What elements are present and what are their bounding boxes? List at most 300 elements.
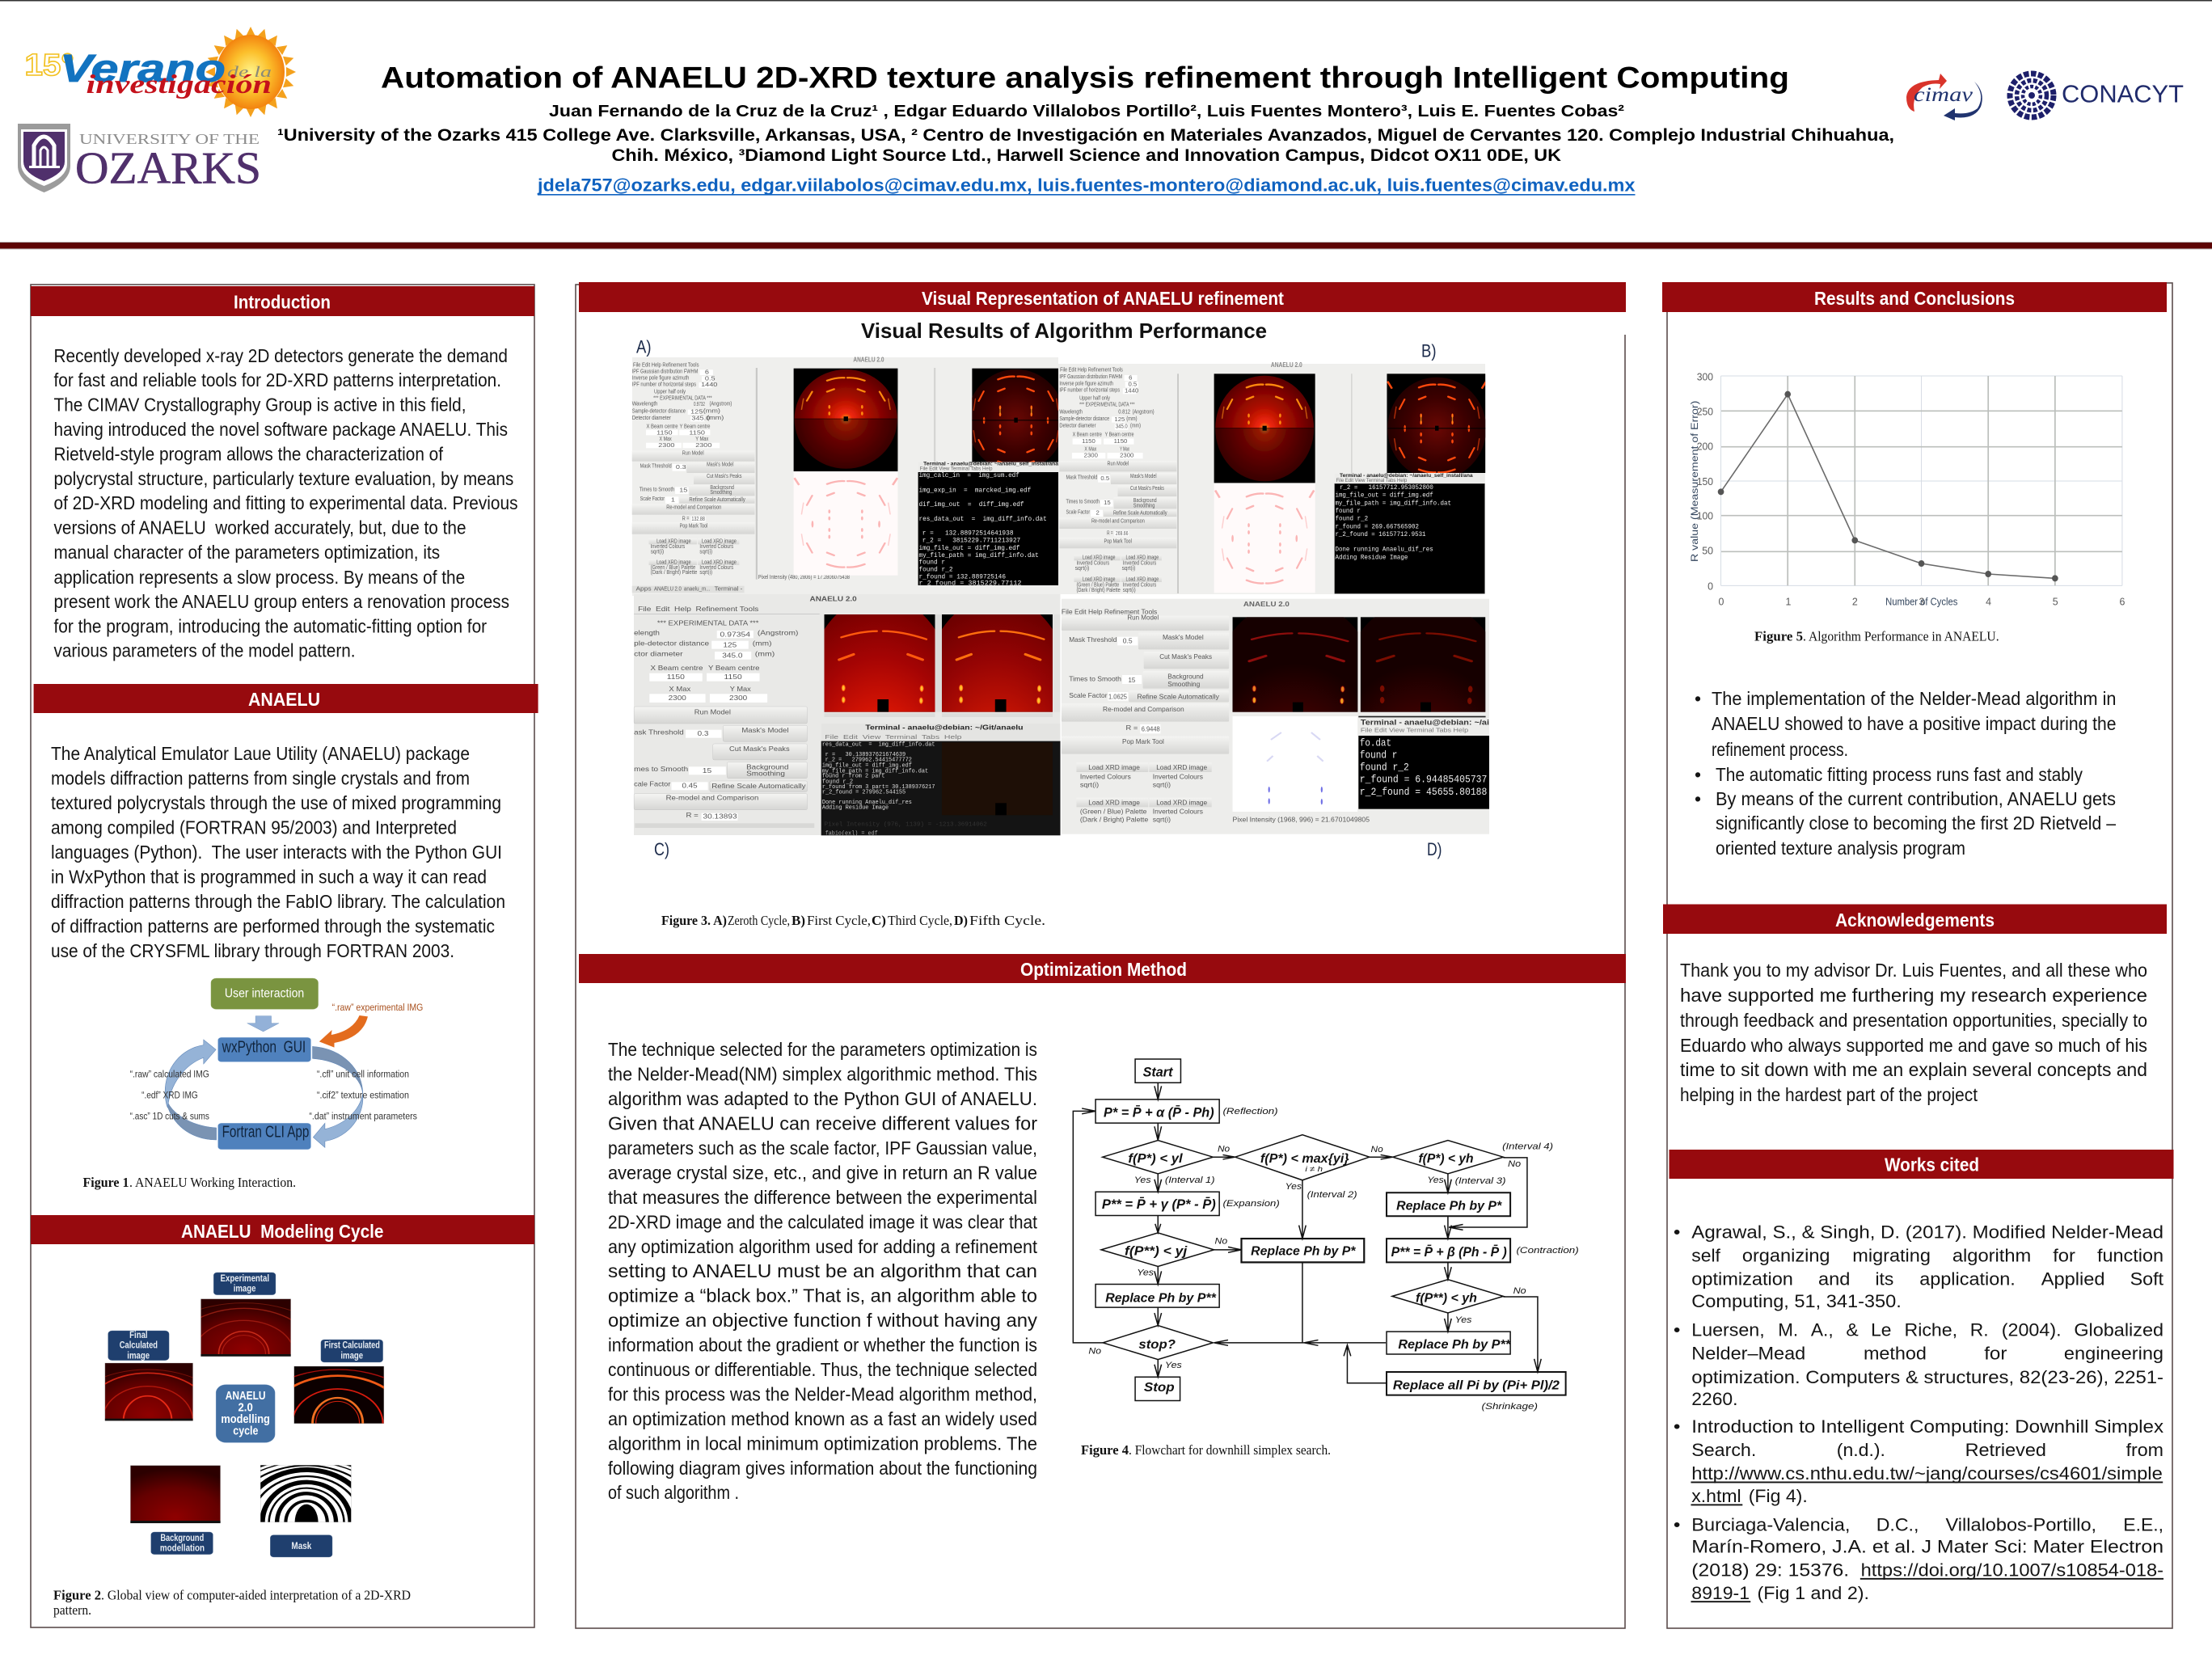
header logo: Verano de la investigación: 15°: [24, 49, 74, 82]
screenshot C: third cycle: *** EXPERIMENTAL DATA ***: [657, 619, 759, 627]
screenshot B: first cycle: sqrt(i): [1123, 586, 1136, 593]
text block: optimization method: following diagram gives information about the functioning: [608, 1458, 1037, 1479]
screenshot A: zeroth cycle: 0.5: [705, 375, 716, 382]
text block: optimization method: 2D-XRD image and the calculated image it was clear that: [608, 1211, 1038, 1232]
label: first calculated image: [321, 1340, 383, 1362]
screenshot A: zeroth cycle: Y Max: [695, 436, 708, 442]
text block: introduction: Rietveld-style program allows the characterization of: [53, 443, 443, 464]
heading: ANAELU: ANAELU: [248, 689, 320, 710]
text block: works cited: R.: [1970, 1320, 1989, 1340]
heading: ANAELU Modeling Cycle: ANAELU Modeling Cycle: [181, 1221, 383, 1242]
screenshot B: first cycle: IPF Gaussian distribution FWHM: [1059, 373, 1122, 380]
screenshot A: zeroth cycle: 0.9732: [694, 401, 705, 407]
figure 4: downhill simplex flowchart: No: [1508, 1159, 1521, 1169]
screenshot D: fifth cycle: Inverted Colours: [1080, 773, 1131, 780]
terminal D: Terminal - anaelu@debian: ~/ai: [1361, 719, 1489, 728]
screenshot A: zeroth cycle: 6: [705, 369, 710, 375]
header logo: Verano de la investigación: [24, 27, 296, 117]
text block: acknowledgements: [1680, 960, 2147, 1105]
text block: works cited: Agrawal, S., & Singh, D. (2017). Modified Nelder-Mead: [1691, 1222, 2163, 1243]
axis tick labels: 2: [1852, 595, 1858, 607]
screenshot C: third cycle: cale Factor: [634, 780, 670, 788]
text block: ANAELU description: The Analytical Emulator Laue Utility (ANAELU) package: [51, 743, 470, 764]
screenshot D: fifth cycle: [1062, 599, 1509, 834]
axis tick labels: 0: [1718, 595, 1724, 607]
screenshot A: zeroth cycle: sqrt(i): [699, 548, 712, 555]
text block: ANAELU description: diffraction patterns through the FabIO library. The calculation: [51, 891, 505, 912]
text block: works cited: function: [2097, 1245, 2163, 1265]
text block: works cited: Globalized: [2074, 1320, 2163, 1340]
header logo: Verano de la investigación: Verano: [60, 48, 226, 91]
label: D: D): [1427, 839, 1442, 859]
text block: works cited: 8919-1: [1691, 1583, 1750, 1603]
figure 4: downhill simplex flowchart: No: [1088, 1346, 1101, 1356]
terminal A: Terminal - anaelu@debian: ~/anaelu_self_install/ana: [923, 461, 1059, 466]
text block: introduction: application represents a slow process. By means of the: [53, 567, 465, 588]
terminal A: dif_img_out = diff_img.edf: [918, 500, 1024, 509]
screenshot A: zeroth cycle: ANAELU 2.0: [853, 357, 884, 363]
axis tick labels: 0: [1708, 580, 1713, 592]
screenshot D: fifth cycle: (Green / Blue) Palette: [1080, 808, 1146, 816]
text block: introduction: versions of ANAELU worked accurately, but, due to the: [53, 517, 466, 538]
axis tick labels: 200: [1697, 441, 1713, 452]
screenshot A: zeroth cycle: 0.3: [676, 464, 686, 471]
screenshot A: zeroth cycle: sqrt(i): [699, 569, 712, 576]
screenshot A: zeroth cycle: 2300: [658, 442, 675, 449]
terminal D: found r_2: [1360, 762, 1409, 774]
calculated image B: [1387, 374, 1486, 479]
text block: ANAELU description: [51, 743, 505, 961]
box: ANAELU 2.0 modelling cycle: cycle: [233, 1424, 258, 1437]
text block: optimization method: parameters such as the scale factor, IPF Gaussian value,: [608, 1138, 1037, 1159]
screenshot B: first cycle: 2300: [1120, 452, 1133, 459]
caption: figure 3: Figure 3. A): [661, 913, 727, 928]
terminal A: img_exp_in = marcked_img.edf: [918, 486, 1031, 495]
screenshot B: first cycle: 1150: [1082, 437, 1095, 445]
header logo: University of the Ozarks: OZARKS: [75, 144, 261, 194]
text block: optimization method: that measures the difference between the experimental: [608, 1187, 1037, 1208]
screenshot C: third cycle: 0.97354: [720, 631, 750, 638]
terminal C: found r from 2 part: [822, 773, 885, 779]
line chart: R value versus number of cycles: [1689, 371, 2125, 607]
text block: works cited: Burciaga-Valencia,: [1691, 1514, 1850, 1534]
figure 4: downhill simplex flowchart: Replace all Pi by (Pi+ Pl)/2: [1393, 1378, 1560, 1392]
terminal A: res_data_out = img_diff_info.dat: [918, 515, 1047, 523]
label: C: C): [654, 839, 669, 859]
header logo: University of the Ozarks: UNIVERSITY OF THE: [79, 131, 260, 147]
label: mask: [270, 1535, 332, 1557]
text block: works cited: Applied: [2041, 1268, 2104, 1289]
screenshot B: first cycle: Mask Threshold: [1066, 474, 1097, 481]
figure 4: downhill simplex flowchart: Yes: [1165, 1361, 1182, 1370]
terminal A: found r: [918, 559, 945, 567]
heading: Acknowledgements: Acknowledgements: [1835, 910, 1995, 931]
screenshot C: third cycle: X Max: [669, 686, 691, 693]
caption: figure 3: Third Cycle,: [888, 913, 952, 928]
screenshot C: third cycle: 0.3: [698, 730, 709, 737]
heading: Introduction: [31, 286, 534, 316]
text block: conclusions: ANAELU showed to have a positive impact during the: [1712, 713, 2117, 734]
logo: cimav: cimav: [1914, 84, 1973, 106]
text block: ANAELU description: in WxPython that is programmed in such a way it can read: [51, 867, 487, 888]
text block: conclusions: oriented texture analysis program: [1716, 838, 1965, 859]
text block: introduction: manual character of the parameters optimization, its: [53, 542, 440, 563]
text block: works cited: Le: [1871, 1320, 1891, 1340]
labels: file types: [130, 1069, 417, 1121]
screenshot D: fifth cycle: Load XRD image: [1088, 799, 1140, 806]
label: final calculated image: Final: [129, 1329, 148, 1340]
screenshot C: third cycle: 1150: [667, 673, 685, 681]
text block: works cited: migrating: [1852, 1245, 1931, 1265]
terminal A: r_2_found = 3815229.77112: [918, 579, 1022, 588]
screenshot D: fifth cycle: Mask's Model: [1163, 633, 1204, 641]
screenshot C: third cycle: 0.45: [682, 782, 698, 790]
screenshot C: third cycle: 2300: [729, 694, 747, 702]
screenshot A: zeroth cycle: Background: [710, 484, 734, 491]
screenshot C: third cycle: X Beam centre: [650, 665, 703, 672]
screenshot B: first cycle: Y Max: [1120, 445, 1129, 452]
figure 4: downhill simplex flowchart: No: [1218, 1144, 1230, 1154]
screenshot A: zeroth cycle: Y Beam centre: [680, 423, 711, 429]
label: final calculated image: image: [127, 1350, 150, 1361]
screenshot B: first cycle: Load XRD image: [1083, 576, 1116, 583]
labels: file types: “.edf” XRD IMG: [141, 1090, 198, 1100]
text block: optimization method: The technique selected for the parameters optimization is: [608, 1039, 1037, 1060]
figure 4: downhill simplex flowchart: (Reflection): [1222, 1106, 1278, 1116]
axis tick labels: 100: [1697, 510, 1713, 521]
figure title: Visual Results of Algorithm Performance: [861, 319, 1267, 343]
image: experimental: [201, 1298, 291, 1357]
text block: introduction: various parameters of the model pattern.: [53, 640, 356, 661]
text block: optimization method: setting to ANAELU must be an algorithm that can: [608, 1260, 1037, 1281]
arrow: raw experimental input: [319, 1015, 368, 1048]
screenshot A: zeroth cycle: Scale Factor: [640, 496, 665, 502]
text block: acknowledgements: Thank you to my advisor Dr. Luis Fuentes, and all these who: [1680, 960, 2147, 981]
diffraction image D right: [1360, 617, 1486, 712]
difference image B: [1214, 483, 1315, 593]
terminal B: my_file_path = img_diff_info.dat: [1335, 499, 1451, 507]
terminal C: my_file_path = img_diff_info.dat: [822, 768, 928, 775]
screenshot D: fifth cycle: Re-model and Comparison: [1103, 705, 1184, 713]
authors: Juan Fernando de la Cruz de la Cruz¹ , Edgar Eduardo Villalobos Portillo², Luis Fuentes Montero³, Luis E. Fuentes Cobas²: [549, 103, 1624, 120]
screenshot B: first cycle: Refine Scale Automatically: [1113, 509, 1167, 517]
screenshot A: zeroth cycle: Mask's Model: [707, 462, 734, 467]
screenshot A: zeroth cycle: Load XRD image: [656, 538, 691, 544]
text block: works cited: D.C.,: [1876, 1514, 1919, 1534]
text block: conclusions: •: [1695, 788, 1701, 809]
diffraction image B top: [1214, 374, 1315, 483]
screenshot C: third cycle: Cut Mask's Peaks: [729, 745, 790, 753]
terminal A: r = 132.88972514641938: [922, 530, 1014, 538]
figure 4: downhill simplex flowchart: No: [1215, 1236, 1227, 1246]
screenshot C: third cycle: Background: [746, 763, 789, 771]
heading: Introduction: Introduction: [234, 292, 331, 313]
figure 1: ANAELU working interaction diagram: [130, 978, 423, 1150]
terminal B: Terminal - anaelu@debian: ~/anaelu_self_install/ana: [1340, 473, 1473, 479]
text block: works cited: x.html: [1691, 1486, 1741, 1506]
terminal C: r = 30.138937621674639: [825, 751, 905, 758]
screenshot B: first cycle: Smoothing: [1133, 502, 1155, 509]
screenshot B: first cycle: 2: [1095, 509, 1100, 517]
screenshot B: first cycle: (mm): [1126, 415, 1138, 422]
text block: works cited: Soft: [2130, 1268, 2163, 1289]
caption: figure 3: First Cycle,: [807, 913, 871, 928]
x axis title: Number of Cycles: [1885, 596, 1957, 607]
label: background modellation: Background: [160, 1532, 204, 1543]
screenshot C: third cycle: 15: [703, 767, 711, 775]
screenshot A: zeroth cycle: Smoothing: [710, 489, 732, 496]
figure 2: modelling cycle diagram: [105, 1273, 385, 1557]
caption: figure 5: Figure 5: [1754, 629, 1803, 644]
affiliations: [277, 126, 1894, 165]
text block: ANAELU description: of diffraction patterns are performed through the systematic: [51, 915, 495, 936]
screenshot B: first cycle: Run Model: [1108, 460, 1129, 467]
title: Automation of ANAELU 2D-XRD texture analysis refinement through Intelligent Computing: [381, 61, 1789, 94]
screenshot B: first cycle: X Beam centre: [1073, 431, 1102, 437]
text block: works cited: (2004).: [2002, 1320, 2062, 1340]
screenshot D: fifth cycle: Pixel Intensity (1968, 996) = 21.6701049805: [1233, 816, 1370, 824]
screenshot A: zeroth cycle: (Green / Blue) Palette: [651, 564, 696, 571]
screenshot D: fifth cycle: Pop Mark Tool: [1122, 737, 1164, 745]
label: first calculated image: First Calculated: [324, 1340, 380, 1350]
screenshot D: fifth cycle: Cut Mask's Peaks: [1159, 652, 1213, 661]
screenshot B: first cycle: Load XRD image: [1125, 554, 1159, 561]
screenshot A: zeroth cycle: Cut Mask's Peaks: [707, 473, 741, 479]
label: first calculated image: image: [340, 1350, 363, 1361]
screenshot A: zeroth cycle: Mask Threshold: [640, 463, 672, 469]
screenshot A: zeroth cycle: sqrt(i): [651, 548, 664, 555]
diffraction image D left: [1232, 617, 1358, 712]
caption: figure 1: . ANAELU Working Interaction.: [129, 1175, 296, 1190]
label: mask: Mask: [291, 1540, 312, 1551]
screenshot D: fifth cycle: 1.0625: [1108, 693, 1127, 700]
figure 4: downhill simplex flowchart: Yes: [1455, 1315, 1471, 1325]
caption: figure 1: Figure 1: [82, 1175, 129, 1190]
terminal D: File Edit View Terminal Tabs Help: [1361, 727, 1468, 734]
heading: Results and Conclusions: [1662, 282, 2167, 312]
image: background modelling: [130, 1466, 221, 1523]
box: Fortran CLI App: [218, 1122, 310, 1150]
connectors: [1073, 1083, 1541, 1383]
screenshot A: zeroth cycle: Wavelength: [632, 401, 657, 407]
figure 4: downhill simplex flowchart: Start: [1143, 1064, 1173, 1079]
screenshot B: first cycle: 125: [1114, 416, 1125, 423]
text block: optimization method: Given that ANAELU can receive different values for: [608, 1112, 1037, 1133]
text block: conclusions: refinement process.: [1712, 739, 1848, 760]
label: background modellation: modellation: [160, 1543, 205, 1553]
figure 4: downhill simplex flowchart: f(P*) < max{yi}: [1260, 1151, 1349, 1166]
screenshot C: third cycle: elength: [634, 629, 660, 637]
header logo: Verano de la investigación: investigación: [86, 70, 272, 99]
screenshot A: zeroth cycle: Refine Scale Automatically: [689, 496, 745, 503]
screenshot A: zeroth cycle: Load XRD image: [702, 538, 737, 544]
axis tick labels: 1: [1786, 595, 1792, 607]
figure 4: downhill simplex flowchart: No: [1513, 1285, 1526, 1296]
terminal C: [821, 724, 1061, 837]
terminal B: [1335, 473, 1484, 593]
screenshot D: fifth cycle: Times to Smooth: [1069, 675, 1121, 682]
screenshot B: first cycle: Pop Mark Tool: [1104, 538, 1132, 544]
screenshot A: zeroth cycle: X Beam centre: [646, 423, 678, 429]
text block: works cited: and: [1818, 1268, 1850, 1289]
terminal A: img_file_out = diff_img.edf: [918, 544, 1019, 552]
figure 4: downhill simplex flowchart: [1073, 1059, 1579, 1411]
text block: works cited: (n.d.).: [1837, 1440, 1885, 1460]
terminal D: r_found = 6.94485405737: [1360, 775, 1487, 786]
text block: ANAELU description: use of the CRYSFML library through FORTRAN 2003.: [51, 940, 454, 961]
screenshot B: first cycle: Inverted Colours: [1076, 559, 1109, 566]
image: final calculated: [105, 1363, 193, 1421]
screenshot B: first cycle: (Green / Blue) Palette: [1076, 581, 1119, 588]
label: final calculated image: Calculated: [120, 1340, 158, 1350]
label: final calculated image: [108, 1329, 169, 1361]
data points: [1718, 391, 2058, 581]
screenshot D: fifth cycle: 0.5: [1123, 637, 1133, 645]
figure 4: downhill simplex flowchart: P** = P̄ + γ (P* - P̄): [1102, 1197, 1216, 1211]
figure 4: downhill simplex flowchart: (Interval 4): [1502, 1142, 1553, 1151]
diffraction image A top: [794, 369, 897, 471]
terminal C: r_2_found = 279962.544155: [822, 789, 905, 796]
terminal B: found r_2: [1335, 514, 1368, 523]
screenshot B: first cycle: X Max: [1084, 445, 1096, 452]
screenshot B: first cycle: Inverted Colours: [1123, 559, 1156, 566]
labels: file types: “.raw” calculated IMG: [130, 1069, 209, 1079]
screenshot C: third cycle: File Edit Help Refinement Tools: [638, 606, 758, 613]
axis tick labels: 3: [1919, 595, 1925, 607]
text block: works cited: http://www.cs.nthu.edu.tw/~jang/courses/cs4601/simple: [1691, 1463, 2163, 1484]
text block: conclusions: significantly close to becoming the first 2D Rietveld –: [1716, 813, 2116, 834]
screenshot A: zeroth cycle: IPF number of horizontal steps: [632, 381, 696, 387]
screenshot C: third cycle: Y Max: [730, 686, 752, 693]
arrow: user to GUI: [247, 1016, 279, 1032]
screenshot D: fifth cycle: Inverted Colours: [1153, 808, 1204, 816]
screenshot D: fifth cycle: Scale Factor: [1069, 691, 1108, 699]
screenshot C: third cycle: (Angstrom): [758, 629, 799, 637]
axis tick labels: 150: [1697, 475, 1713, 488]
caption: figure 3: C): [872, 913, 886, 928]
screenshot B: first cycle: 1150: [1114, 437, 1127, 445]
text block: works cited: engineering: [2064, 1344, 2163, 1364]
text block: introduction: present work the ANAELU group enters a renovation process: [53, 591, 509, 612]
figure 4: downhill simplex flowchart: stop?: [1138, 1337, 1176, 1352]
terminal A: found r_2: [918, 566, 953, 574]
screenshot C: third cycle: (mm): [755, 650, 775, 658]
text block: works cited: for: [2053, 1245, 2075, 1265]
screenshot B: first cycle: Mask's Model: [1130, 472, 1157, 479]
screenshot A: zeroth cycle: (Angstrom): [710, 401, 732, 407]
caption: figure 3: Fifth Cycle.: [969, 913, 1045, 928]
screenshot B: first cycle: IPF number of horizontal steps: [1059, 386, 1120, 394]
figure 4: downhill simplex flowchart: f(P*) < yh: [1418, 1151, 1474, 1166]
figure 4: downhill simplex flowchart: i ≠ h: [1305, 1166, 1323, 1174]
screenshot D: fifth cycle: ANAELU 2.0: [1243, 600, 1290, 608]
screenshot B: first cycle: 0.5: [1100, 475, 1109, 482]
text block: ANAELU description: textured polycrystals through the use of mixed programming: [51, 792, 501, 813]
logo: CONACYT: [2010, 74, 2184, 117]
screenshot D: fifth cycle: (Dark / Bright) Palette: [1080, 816, 1148, 824]
screenshot A: zeroth cycle: 132.88: [691, 516, 705, 522]
calculated image A: [967, 369, 1065, 471]
logo: cimav: [1906, 74, 1982, 120]
screenshot B: first cycle: 0.812: [1118, 408, 1130, 416]
text block: works cited: A.,: [1811, 1320, 1834, 1340]
heading: Results and Conclusions: Results and Conclusions: [1814, 288, 2015, 309]
text block: works cited: •: [1674, 1320, 1680, 1340]
text block: optimization method: continuous or differentiable. Thus, the technique selected: [608, 1359, 1037, 1380]
screenshot A: zeroth cycle: Detector diameter: [632, 415, 671, 421]
screenshot B: first cycle: Detector diameter: [1059, 422, 1096, 429]
screenshot A: zeroth cycle: Terminal -: [715, 586, 743, 592]
figure 4: downhill simplex flowchart: Replace Ph by P**: [1105, 1290, 1217, 1305]
text block: conclusions: The automatic fitting process runs fast and stably: [1716, 764, 2083, 785]
terminal C: img_file_out = diff_img.edf: [822, 762, 912, 769]
screenshot D: fifth cycle: Load XRD image: [1156, 763, 1207, 771]
caption: figure 3: [661, 913, 1045, 928]
text block: optimization method: algorithm in local minimum optimization problems. The: [608, 1433, 1037, 1454]
screenshot A: zeroth cycle: Sample-detector distance: [632, 408, 686, 414]
heading: Visual Representation: [579, 282, 1626, 312]
box: ANAELU 2.0 modelling cycle: 2.0: [239, 1400, 253, 1414]
text block: works cited: •: [1674, 1416, 1680, 1437]
figure 4: downhill simplex flowchart: Replace Ph by P*: [1251, 1244, 1356, 1258]
screenshot B: first cycle: 0.5: [1128, 381, 1137, 388]
screenshot D: fifth cycle: Refine Scale Automatically: [1138, 693, 1219, 701]
text block: introduction: for the program, introducing the automatic-fitting option for: [53, 616, 487, 637]
screenshot D: fifth cycle: sqrt(i): [1080, 781, 1099, 788]
caption: figure 3: B): [792, 913, 805, 928]
text block: works cited: organizing: [1742, 1245, 1830, 1265]
screenshot D: fifth cycle: sqrt(i): [1153, 816, 1171, 824]
terminal B: img_file_out = diff_img.edf: [1335, 491, 1433, 500]
screenshot A: zeroth cycle: 1150: [689, 429, 705, 436]
text block: works cited: •: [1674, 1514, 1680, 1534]
caption: figure 3: D): [954, 913, 968, 928]
screenshot A: zeroth cycle: Inverted Colours: [651, 543, 685, 550]
screenshot A: zeroth cycle: Load XRD image: [656, 559, 691, 565]
text block: works cited: E.E.,: [2123, 1514, 2163, 1534]
terminal B: Adding Residue Image: [1335, 553, 1408, 562]
axis tick labels: 250: [1697, 405, 1713, 417]
text block: works cited: Villalobos-Portillo,: [1946, 1514, 2096, 1534]
screenshot B: first cycle: Inverse pole figure azimuth: [1059, 380, 1113, 386]
terminal C: File Edit View Terminal Tabs Help: [825, 733, 962, 741]
text block: acknowledgements: have supported me furthering my research experience: [1680, 985, 2147, 1006]
caption: figure 2: . Global view of computer-aided interpretation of a 2D-XRD: [101, 1587, 411, 1602]
header logo: University of the Ozarks: [18, 124, 261, 194]
terminal C: r_2 = 279962.54415477772: [825, 757, 912, 763]
text block: optimization method: for this process was the Nelder-Mead algorithm method,: [608, 1384, 1037, 1405]
caption: figure 2: [53, 1587, 411, 1618]
contact emails: jdela757@ozarks.edu, edgar.viilabolos@cimav.edu.mx, luis.fuentes-montero@diamond.ac.uk, luis.fuentes@cimav.edu.mx: [537, 175, 1636, 196]
text block: works cited: 2260.: [1691, 1389, 1738, 1409]
terminal C: Done running Anaelu_dif_res: [822, 799, 912, 806]
terminal D: r_2_found = 45655.80188: [1360, 787, 1487, 799]
panel: left column (Introduction, ANAELU, Modeling Cycle): [31, 285, 538, 1627]
affiliations: Chih. México, ³Diamond Light Source Ltd., Harwell Science and Innovation Campus, Didcot OX11 0DE, UK: [611, 146, 1561, 165]
text block: works cited: Computing, 51, 341-350.: [1691, 1291, 1902, 1311]
figure 4: downhill simplex flowchart: f(P**) < yj: [1125, 1244, 1188, 1258]
box: user interaction: [211, 978, 319, 1009]
image: first calculated: [294, 1366, 385, 1424]
screenshot B: first cycle: Load XRD image: [1083, 554, 1116, 561]
screenshot A: zeroth cycle: 1150: [656, 429, 673, 436]
caption: figure 4: Figure 4: [1081, 1442, 1129, 1458]
screenshot D: fifth cycle: Mask Threshold: [1069, 635, 1117, 644]
text block: works cited: [1674, 1222, 2163, 1603]
axis tick labels: 50: [1702, 545, 1713, 556]
screenshot A: zeroth cycle: Inverse pole figure azimuth: [632, 374, 689, 381]
figure 4: downhill simplex flowchart: (Interval 2): [1307, 1189, 1357, 1200]
